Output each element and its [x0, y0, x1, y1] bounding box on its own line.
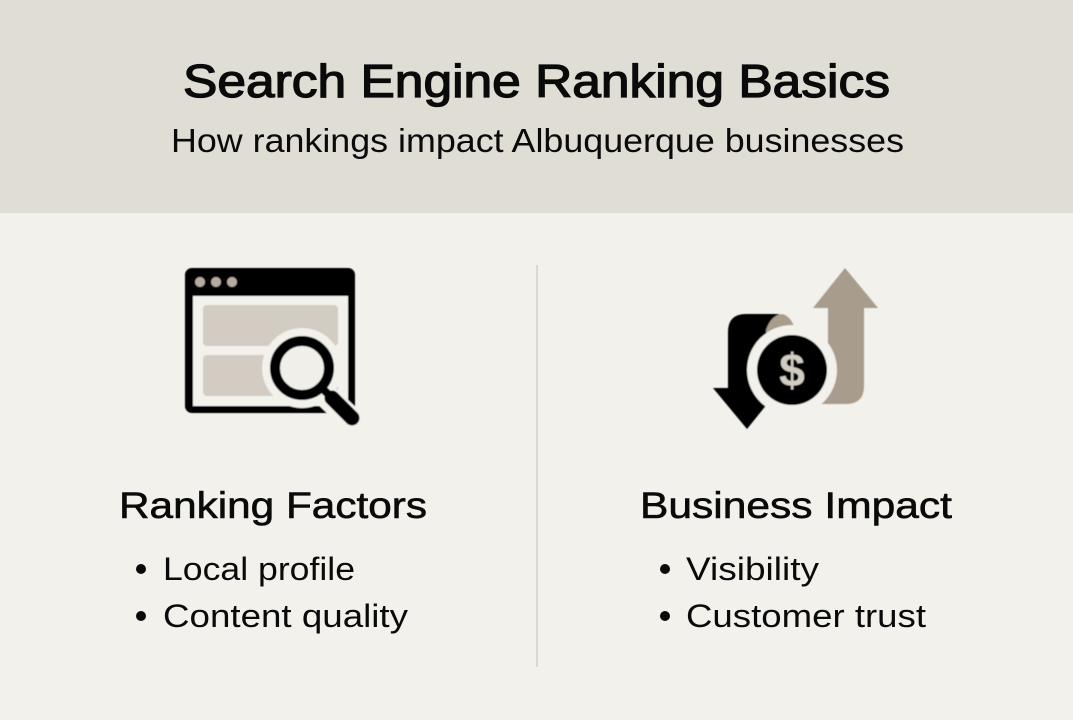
- bullet list: ranking factors: Local profile: [163, 551, 355, 587]
- header banner: [0, 0, 1073, 213]
- icon: browser window with magnifying glass: [185, 268, 355, 420]
- title: Search Engine Ranking Basics: [183, 55, 890, 107]
- heading: business impact: Business Impact: [640, 485, 953, 526]
- bullet list: business impact: Customer trust: [686, 598, 926, 634]
- heading: ranking factors: Ranking Factors: [119, 485, 427, 526]
- panel: business impact: [640, 268, 953, 634]
- bullet list: business impact: [660, 551, 926, 634]
- panel: ranking factors: [119, 268, 427, 634]
- bullet list: ranking factors: Content quality: [163, 598, 408, 634]
- icon: arrows with dollar coin: [713, 268, 878, 429]
- bullet list: business impact: Visibility: [686, 551, 819, 587]
- subtitle: How rankings impact Albuquerque businesses: [171, 122, 904, 159]
- dollar sign: $: [779, 344, 805, 396]
- bullet list: ranking factors: [136, 551, 408, 634]
